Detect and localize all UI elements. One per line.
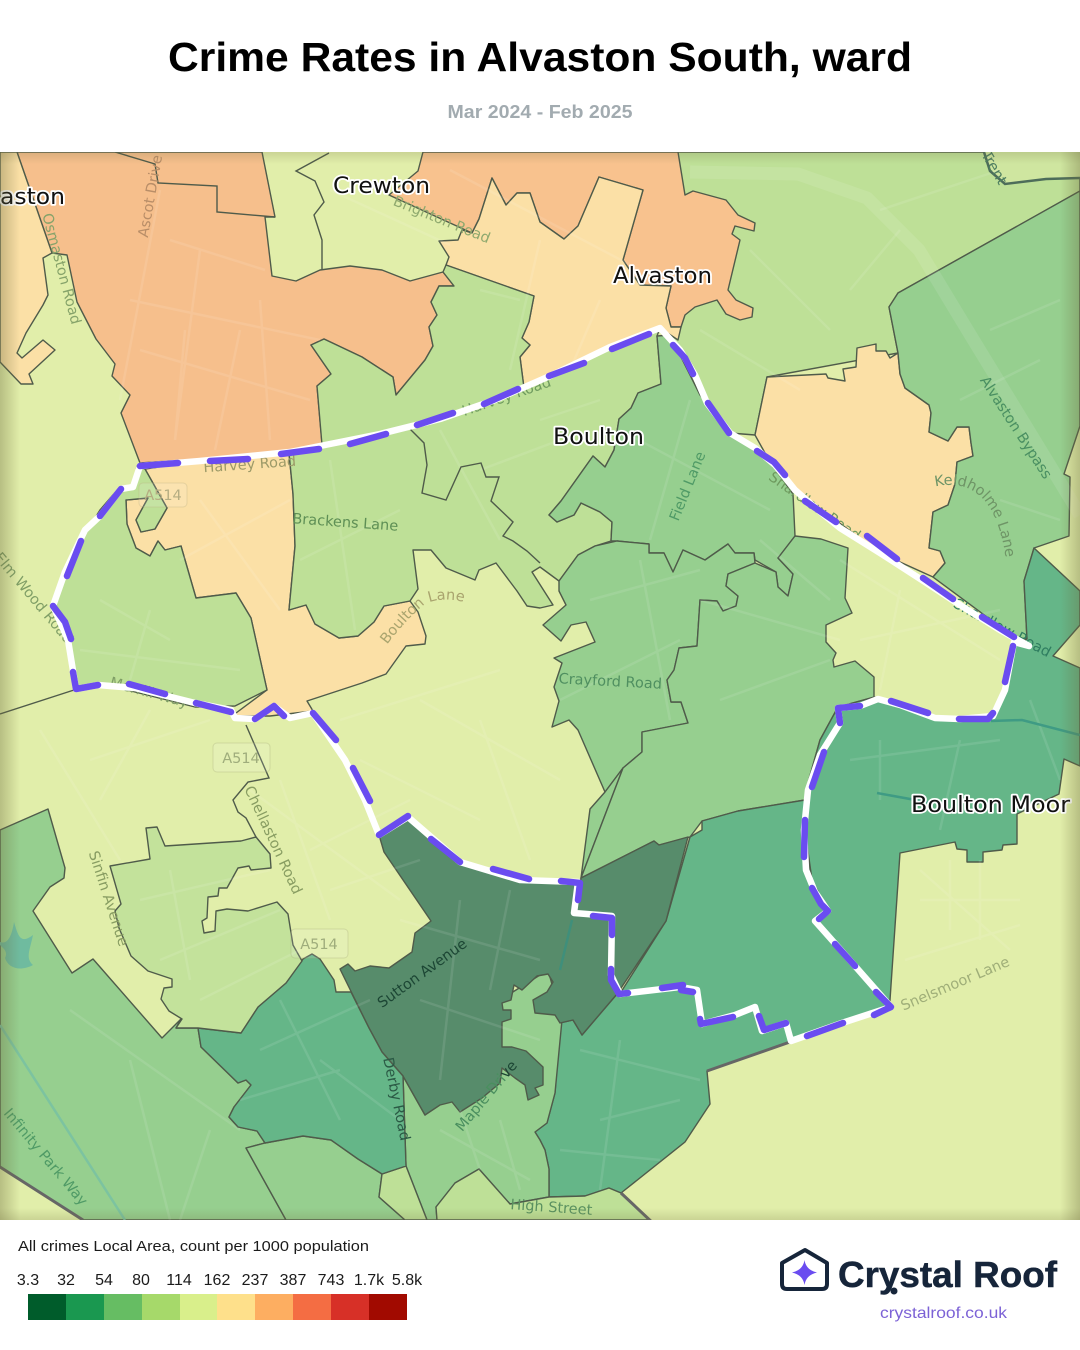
place label: Crewton: Crewton bbox=[333, 174, 430, 199]
area: orange north-west bbox=[17, 152, 454, 463]
line: thick south boundary bbox=[0, 1042, 790, 1225]
logo url: crystalroof.co.uk bbox=[880, 1305, 1008, 1322]
place label: Alvaston: Alvaston bbox=[613, 264, 712, 289]
road label: Merrill Way: Merrill Way bbox=[108, 675, 190, 711]
road badge: A514 north bbox=[139, 483, 187, 507]
area: mid green south-west bbox=[0, 809, 286, 1220]
legend values: 114 bbox=[166, 1272, 192, 1289]
area: green Boulton Moor bbox=[805, 548, 1080, 1007]
icon: house with star bbox=[782, 1250, 827, 1289]
area: dark green wedge bbox=[575, 837, 688, 994]
legend title: All crimes Local Area, count per 1000 population bbox=[18, 1238, 369, 1255]
road label: Sinfin Avenue: Sinfin Avenue bbox=[85, 849, 131, 948]
line: river and boundary edges bbox=[0, 152, 540, 837]
area: north-east light green bbox=[640, 152, 1080, 435]
place label: Boulton Moor: Boulton Moor bbox=[911, 793, 1071, 818]
place label: Boulton: Boulton bbox=[553, 425, 644, 450]
legend values: 32 bbox=[57, 1272, 75, 1289]
area: mid green Crayford bbox=[543, 541, 755, 792]
road label: Derby Road: Derby Road bbox=[379, 1056, 413, 1142]
area: light green Sinfin bbox=[110, 827, 302, 1033]
ward boundary: white casing bbox=[53, 328, 1029, 1041]
legend values: 162 bbox=[204, 1272, 230, 1289]
road label: Brackens Lane: Brackens Lane bbox=[292, 511, 399, 535]
legend colour scale bbox=[28, 1294, 407, 1320]
legend values: 237 bbox=[242, 1272, 268, 1289]
area: mid green Alvaston Bypass bbox=[889, 191, 1080, 639]
road label: Infinity Park Way: Infinity Park Way bbox=[0, 1106, 91, 1209]
logo: Crystal Roof bbox=[782, 1250, 1058, 1322]
panel: choropleth map bbox=[0, 152, 1080, 1220]
area: green Snelsmoor south bbox=[535, 988, 791, 1197]
road label: Harvey Road west: Harvey Road bbox=[203, 454, 297, 476]
area: beyond the river bbox=[984, 152, 1080, 184]
legend values: 3.3 bbox=[17, 1272, 39, 1289]
area: cream Shardlow Road bbox=[755, 344, 973, 577]
legend values: 5.8k bbox=[392, 1272, 423, 1289]
area: mid green Derby Road foot bbox=[246, 1136, 405, 1220]
area: green south of ward bbox=[621, 800, 891, 1041]
area: cream north-centre bbox=[439, 177, 681, 388]
legend values bbox=[17, 1272, 423, 1289]
road label: Snelsmoor Lane: Snelsmoor Lane bbox=[899, 954, 1012, 1014]
legend values: 54 bbox=[95, 1272, 113, 1289]
road label: Maple Drive: Maple Drive bbox=[453, 1058, 521, 1135]
area: cream Harvey Road south bbox=[126, 453, 426, 716]
legend values: 80 bbox=[132, 1272, 150, 1289]
title: Crime Rates in Alvaston South, ward bbox=[168, 34, 912, 80]
area: mid green Maple Drive bbox=[403, 970, 562, 1220]
road label: Field Lane: Field Lane bbox=[667, 450, 709, 523]
legend values: 1.7k bbox=[354, 1272, 385, 1289]
area: cream north-west edge bbox=[0, 152, 55, 384]
road label: High Street: High Street bbox=[510, 1197, 593, 1219]
road label: Boulton Lane: Boulton Lane bbox=[380, 591, 464, 644]
road badge: A514 centre: A514 bbox=[222, 751, 260, 767]
map edge vignette bbox=[0, 152, 1080, 1220]
road badge: A514 south bbox=[291, 929, 348, 958]
area: orange north-centre bbox=[389, 152, 755, 327]
road label: Crayford Road: Crayford Road bbox=[558, 671, 662, 693]
road badge: A514 north: A514 bbox=[144, 488, 182, 504]
road label: Shardlow Road east: Shardlow Road bbox=[950, 596, 1053, 661]
place label: Alvaston (clipped): aston bbox=[0, 185, 65, 210]
icon: pond bbox=[0, 922, 33, 969]
area: light green Boulton bbox=[289, 328, 661, 638]
road label: Harvey Road east: Harvey Road bbox=[460, 375, 553, 420]
road label: Osmaston Road: Osmaston Road bbox=[38, 212, 83, 326]
legend values: 387 bbox=[280, 1272, 306, 1289]
road label: Chellaston Road: Chellaston Road bbox=[241, 784, 305, 897]
logo wordmark: Crystal Roof bbox=[838, 1254, 1058, 1295]
area: mid green sliver bbox=[581, 768, 623, 878]
street texture bbox=[40, 170, 1080, 1220]
legend values: 743 bbox=[318, 1272, 344, 1289]
area: light green west bbox=[54, 466, 267, 707]
road label: Brighton Road: Brighton Road bbox=[391, 194, 492, 247]
road label: Ascot Drive: Ascot Drive bbox=[136, 154, 166, 239]
area: light green High Street bbox=[436, 1169, 650, 1220]
road badge: A514 south: A514 bbox=[300, 937, 338, 953]
road label: Keldholme Lane: Keldholme Lane bbox=[935, 474, 1013, 556]
area: green Derby Road bbox=[198, 954, 406, 1174]
road label: Alvaston Bypass: Alvaston Bypass bbox=[976, 374, 1054, 482]
area: light green foot of Derby Road bbox=[379, 1166, 427, 1220]
ward boundary: purple dashes bbox=[53, 334, 1014, 1036]
road label: Sutton Avenue: Sutton Avenue bbox=[375, 936, 470, 1011]
road label: Trent: Trent bbox=[977, 147, 1010, 188]
water features bbox=[0, 152, 1080, 1220]
area: light green north of Harvey Road bbox=[311, 265, 534, 445]
area: mid green Field Lane bbox=[549, 335, 795, 596]
area: dark green Sutton Avenue bbox=[340, 818, 617, 1115]
legend bbox=[17, 1238, 423, 1320]
road label: Shardlow Road west: Shardlow Road bbox=[765, 469, 863, 544]
area: mid green south-east ward edge bbox=[581, 536, 874, 878]
subtitle: date range: Mar 2024 - Feb 2025 bbox=[448, 102, 632, 122]
road badge: A514 centre bbox=[213, 743, 270, 772]
